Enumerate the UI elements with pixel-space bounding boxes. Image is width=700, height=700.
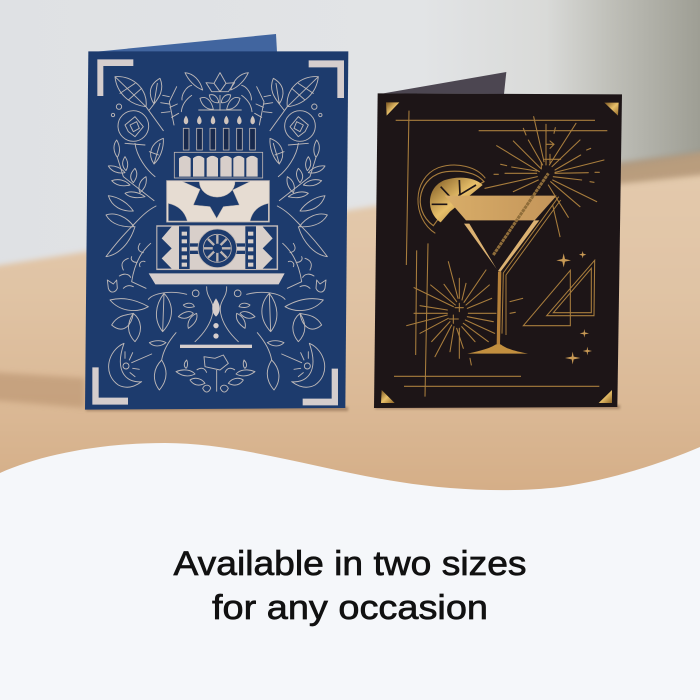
stand [180,298,252,348]
background: wall [0,0,700,300]
floral line art, right side [220,73,327,390]
plate [149,273,285,284]
firework top [485,117,604,237]
triangles [523,260,595,326]
card front [85,51,348,410]
card front [374,93,622,408]
cocktail stirrer [493,173,548,255]
back flap [93,34,277,52]
cake [149,116,285,348]
floral line art, left side [106,73,213,390]
white wave panel [0,443,700,700]
top flower [198,73,242,111]
caption: for any occasion [212,589,488,627]
bottom tier [157,226,278,270]
rosette [198,229,237,268]
bottom flower [176,355,255,392]
firework bottom [407,262,523,365]
card: black martini [374,72,622,408]
background: wooden table [0,148,700,520]
caption [174,545,526,627]
corner cutouts [92,59,344,405]
martini glass [445,196,561,354]
top tier [174,152,263,178]
gold frame lines [394,111,607,397]
gold corners [381,102,619,403]
caption: Available in two sizes [174,545,526,583]
middle tier [167,181,269,222]
lime slice [418,165,485,233]
sparkle stars [556,251,592,364]
card: navy birthday cake [85,34,348,410]
back flap [383,72,506,94]
candles [183,116,255,150]
card shadows on table [86,405,620,411]
